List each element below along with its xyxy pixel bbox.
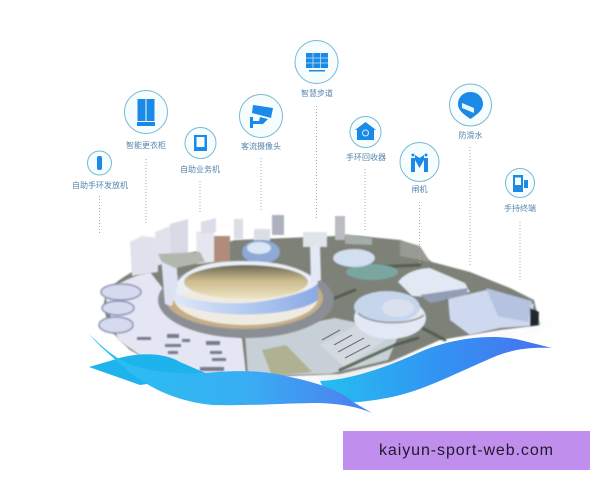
left pylon: [161, 255, 178, 306]
icon: locker: [124, 90, 168, 134]
main stadium: [158, 244, 334, 338]
label: 防滑水: [458, 130, 482, 140]
outer ring: [158, 262, 334, 338]
dotted leader lines: [100, 106, 520, 280]
lower tier: [174, 271, 318, 325]
high-rise towers: [130, 215, 345, 276]
label: 自助业务机: [180, 164, 220, 174]
parking rows: [322, 330, 370, 358]
white roof rim: [176, 261, 318, 296]
item: wristband recycler: [346, 116, 386, 162]
island base: [104, 236, 540, 378]
icon: panel grid: [295, 40, 338, 84]
watermark banner: kaiyun-sport-web.com: [379, 442, 553, 459]
label: 自助手环发放机: [72, 180, 128, 190]
large arena: [354, 291, 426, 339]
item: self-service machine: [180, 128, 220, 174]
icon: wristband: [88, 151, 112, 175]
item: anti-slip water: [450, 84, 492, 140]
wave: right: [320, 337, 552, 403]
item: people-flow camera: [240, 94, 282, 151]
icon: kiosk: [185, 128, 216, 158]
label: 智慧步道: [301, 88, 333, 98]
right pylon: [310, 244, 321, 284]
plaza rings: [99, 284, 141, 333]
stadium island model: [99, 215, 548, 385]
label: 客流摄像头: [241, 141, 281, 151]
icon: handheld: [506, 168, 534, 198]
rear stand: [158, 252, 205, 268]
left plaza: [106, 272, 246, 374]
icon: camera: [240, 94, 282, 138]
watermark banner: [343, 431, 590, 470]
label: 闸机: [412, 184, 428, 194]
item: gate: [400, 142, 439, 194]
island shadow: [108, 318, 548, 385]
green lawn front: [262, 345, 312, 376]
plaza cars: [137, 334, 226, 371]
icon: map pin camera: [450, 84, 492, 126]
item: smart locker: [124, 90, 168, 150]
wave: front: [89, 334, 372, 413]
icon: house recycle: [350, 116, 381, 148]
label: 手环回收器: [346, 152, 386, 162]
right upper pond and arena: [333, 234, 430, 280]
item: wristband dispenser: [72, 151, 128, 190]
front roof: [172, 283, 318, 315]
item: smart walkway: [295, 40, 338, 98]
item: handheld terminal: [504, 168, 536, 213]
tree lines: [330, 265, 450, 370]
track ring: [165, 267, 323, 329]
centre-right ground: [245, 318, 400, 376]
wave: rear small: [89, 354, 210, 385]
parking lot right: [320, 322, 388, 368]
rink building: [398, 268, 470, 303]
seating bowl: [184, 265, 308, 299]
label: 智能更衣柜: [126, 140, 166, 150]
icon: gate: [400, 142, 439, 182]
label: 手持终端: [504, 203, 536, 213]
dome building rear: [242, 240, 280, 264]
right hall complex: [448, 288, 539, 335]
